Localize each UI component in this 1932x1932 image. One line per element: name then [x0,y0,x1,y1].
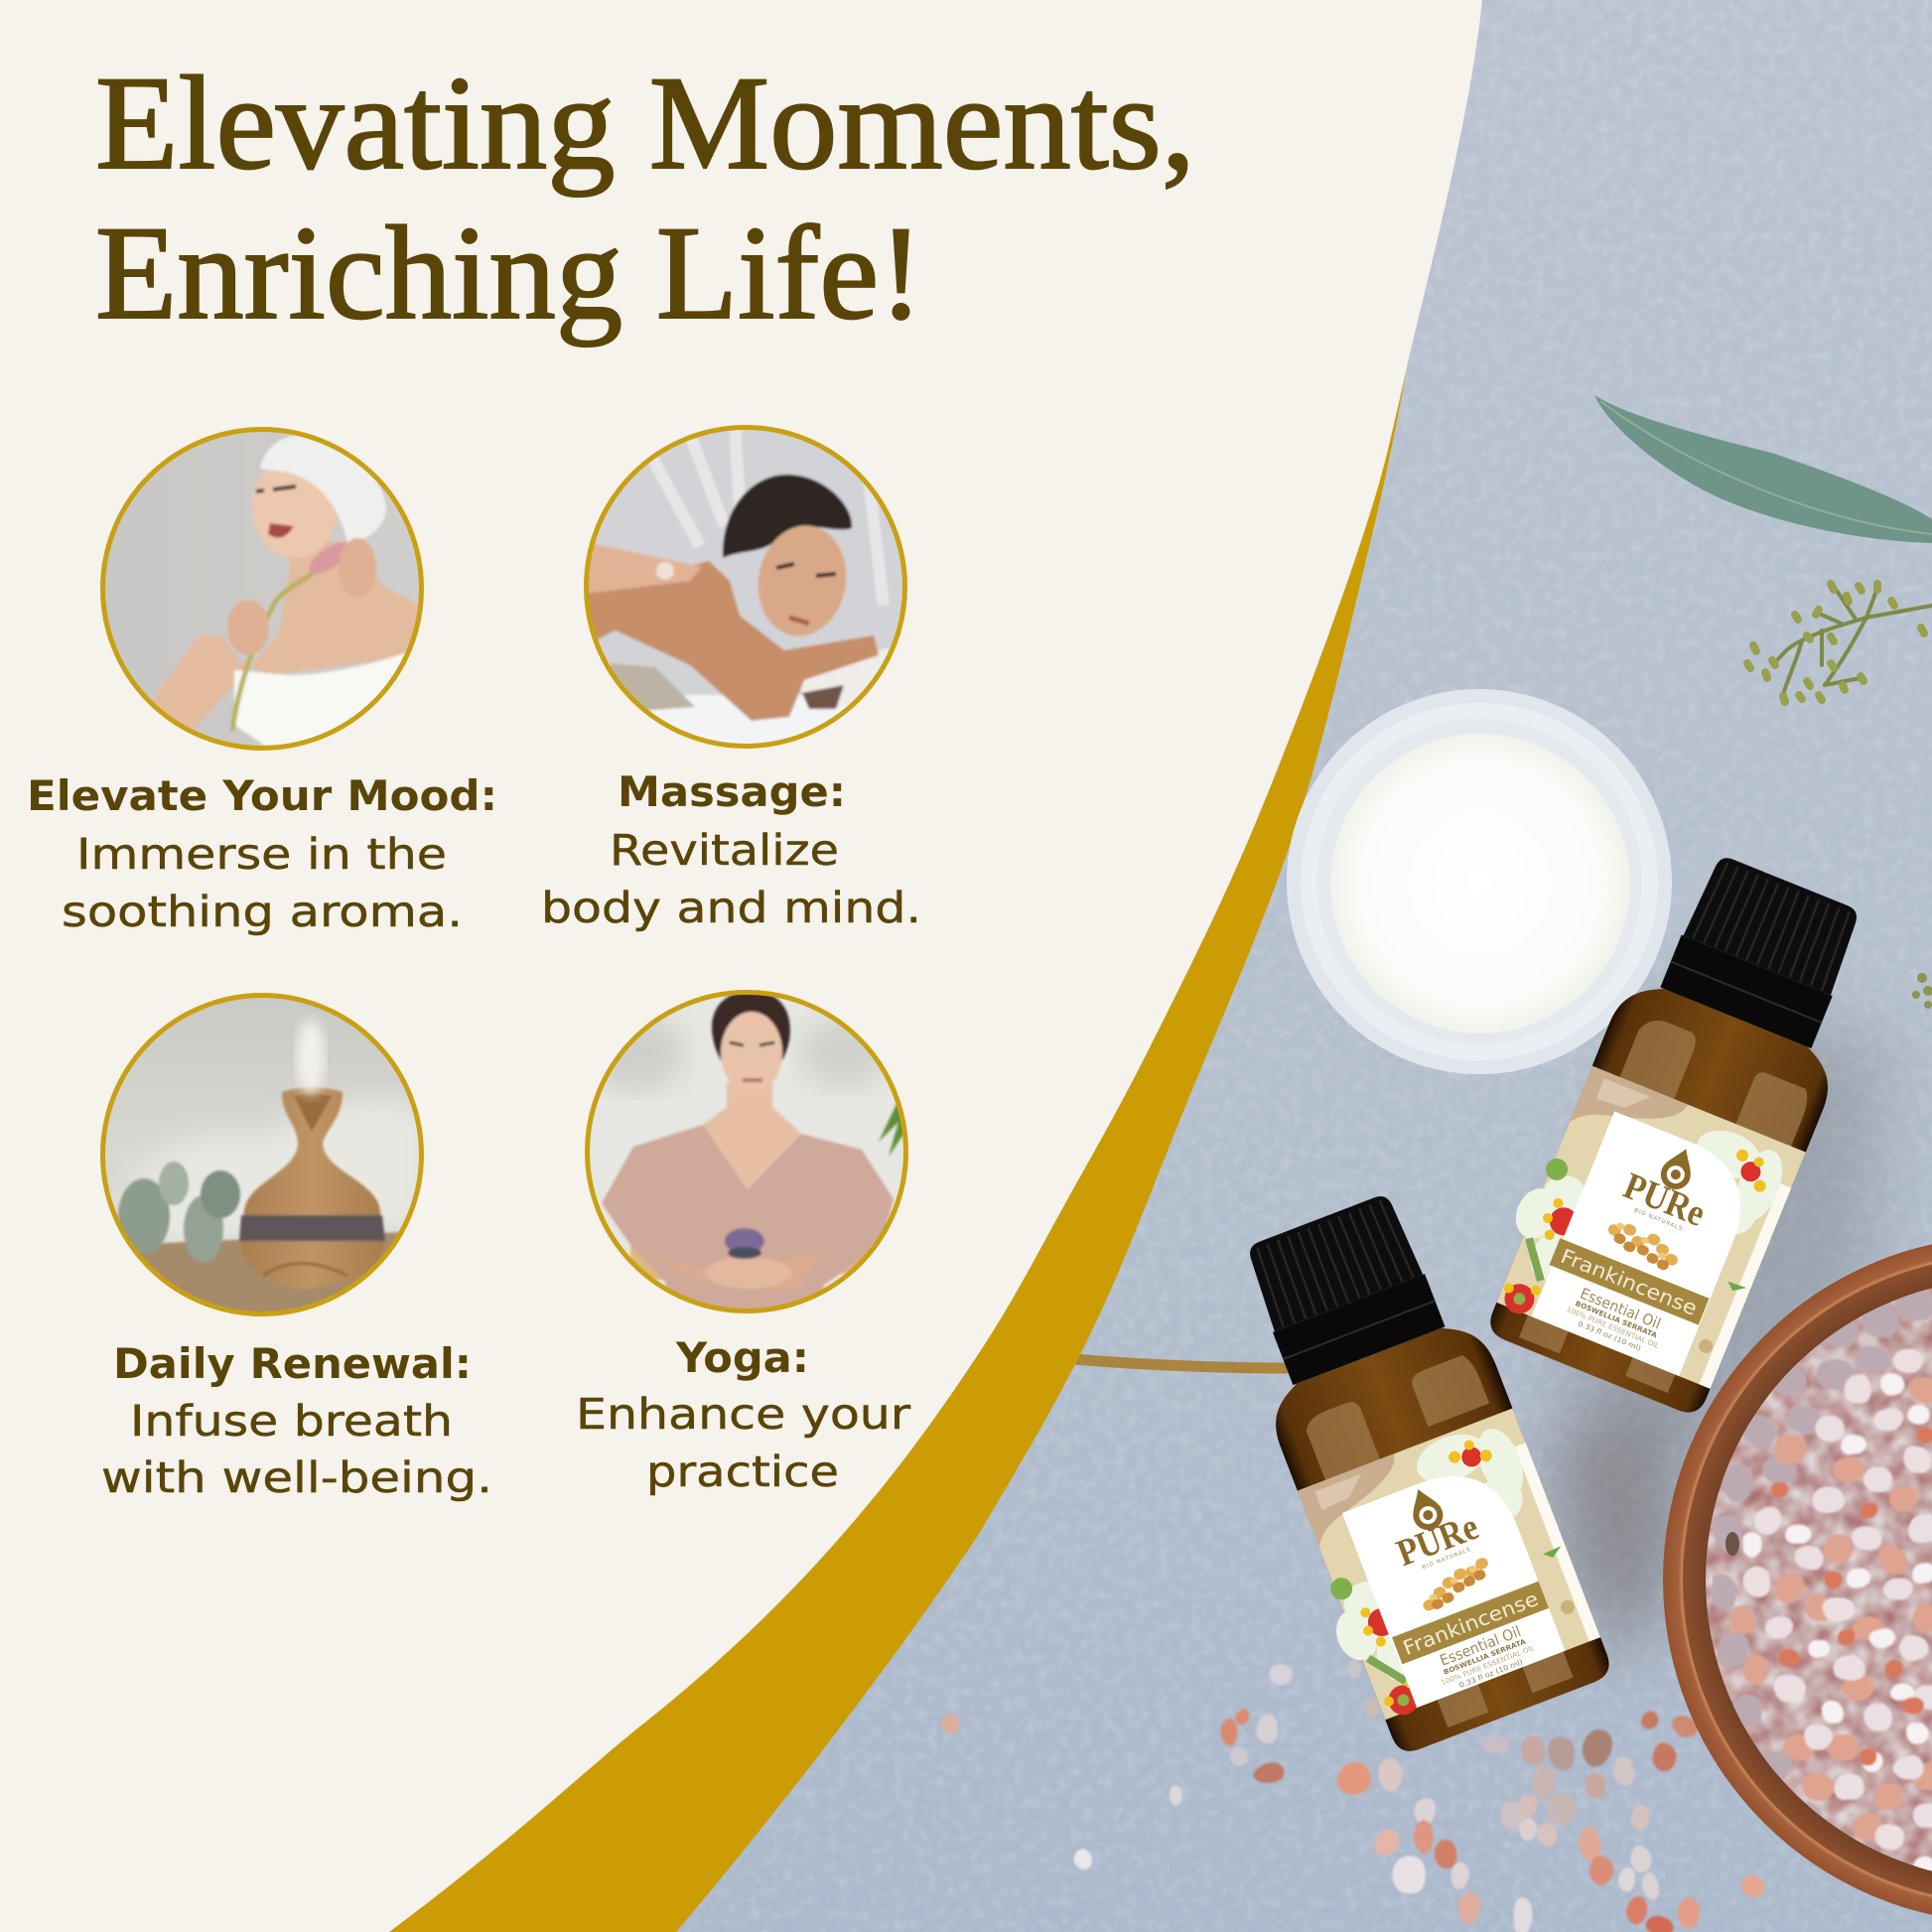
white candle [1287,689,1672,1074]
brand logo: PURe [1618,1165,1711,1235]
label small text: 0.33 fl oz (10 ml) [1577,1319,1642,1352]
glass highlights [1301,1352,1592,1736]
label small text: Essential Oil [1578,1285,1663,1333]
label small text: 100% PURE ESSENTIAL OIL [1565,1306,1660,1350]
twig [1074,1359,1286,1368]
eucalyptus leaf [1594,395,1932,543]
cream panel [0,0,1482,1932]
caption: massage: Revitalize [610,826,839,876]
brand logo [1616,1133,1724,1238]
label small text: 0.33 fl oz (10 ml) [1458,1658,1524,1690]
brand logo: PURe [1391,1506,1484,1575]
caption: massage [541,767,921,933]
bottle cap [1660,852,1865,1048]
caption: yoga: Enhance your [576,1390,910,1440]
brand logo: BIO NATURALS [1422,1547,1472,1571]
caption: daily renewal: Daily Renewal: [113,1339,472,1388]
frankincense resin [1422,1564,1490,1607]
label small text: Essential Oil [1438,1622,1523,1670]
caption: elevate your mood: Immerse in the [76,830,447,880]
label small text [1431,1620,1539,1696]
caption: daily renewal: with well-being. [101,1453,492,1503]
caption: yoga [576,1333,910,1497]
bottle glass [1484,975,1843,1418]
oil name band [1549,1238,1710,1325]
caption: yoga: practice [646,1448,839,1497]
caption: daily renewal: Infuse breath [130,1397,453,1447]
brand logo [1379,1474,1485,1578]
caption: daily renewal [101,1339,492,1503]
small sprig at right edge [1912,973,1932,1009]
glass highlights [1515,1014,1817,1405]
scattered salt crystals [941,1658,1766,1932]
caption: elevate your mood: Elevate Your Mood: [27,771,497,820]
caption: massage: body and mind. [541,884,921,933]
oil name band [1392,1582,1549,1664]
gold curved band [389,367,1407,1932]
label small text: BOSWELLIA SERRATA [1574,1300,1659,1340]
bottle: upper right frankincense [1470,834,1897,1418]
frankincense resin [1608,1224,1677,1267]
caption: yoga: Yoga: [675,1333,809,1382]
title: Elevating Moments, [95,50,1195,198]
oil name band: Frankincense [1400,1587,1542,1660]
wooden bowl of pink salt [1663,1236,1932,1923]
bottle glass [1262,1314,1614,1757]
bottle: lower left frankincense [1194,1178,1614,1762]
bottle cap [1241,1190,1446,1385]
oil name band: Frankincense [1558,1244,1701,1320]
product label [1480,1060,1806,1392]
label small text [1562,1282,1670,1358]
caption: massage: Massage: [618,767,846,816]
label small text: BOSWELLIA SERRATA [1443,1637,1528,1677]
title: Enriching Life! [95,200,923,347]
photo circle: yoga [581,988,913,1320]
caption: elevate your mood: soothing aroma. [62,888,463,937]
product label [1283,1408,1601,1728]
photo circle: woman with towel and flower [99,427,427,755]
photo circle: wooden diffuser [99,993,427,1320]
brand logo: BIO NATURALS [1633,1207,1684,1232]
title [95,50,1195,347]
label small text: 100% PURE ESSENTIAL OIL [1441,1644,1536,1687]
photo circle: massage [581,422,913,755]
eucalyptus flower sprig [1747,584,1932,702]
caption: elevate your mood [27,771,497,937]
